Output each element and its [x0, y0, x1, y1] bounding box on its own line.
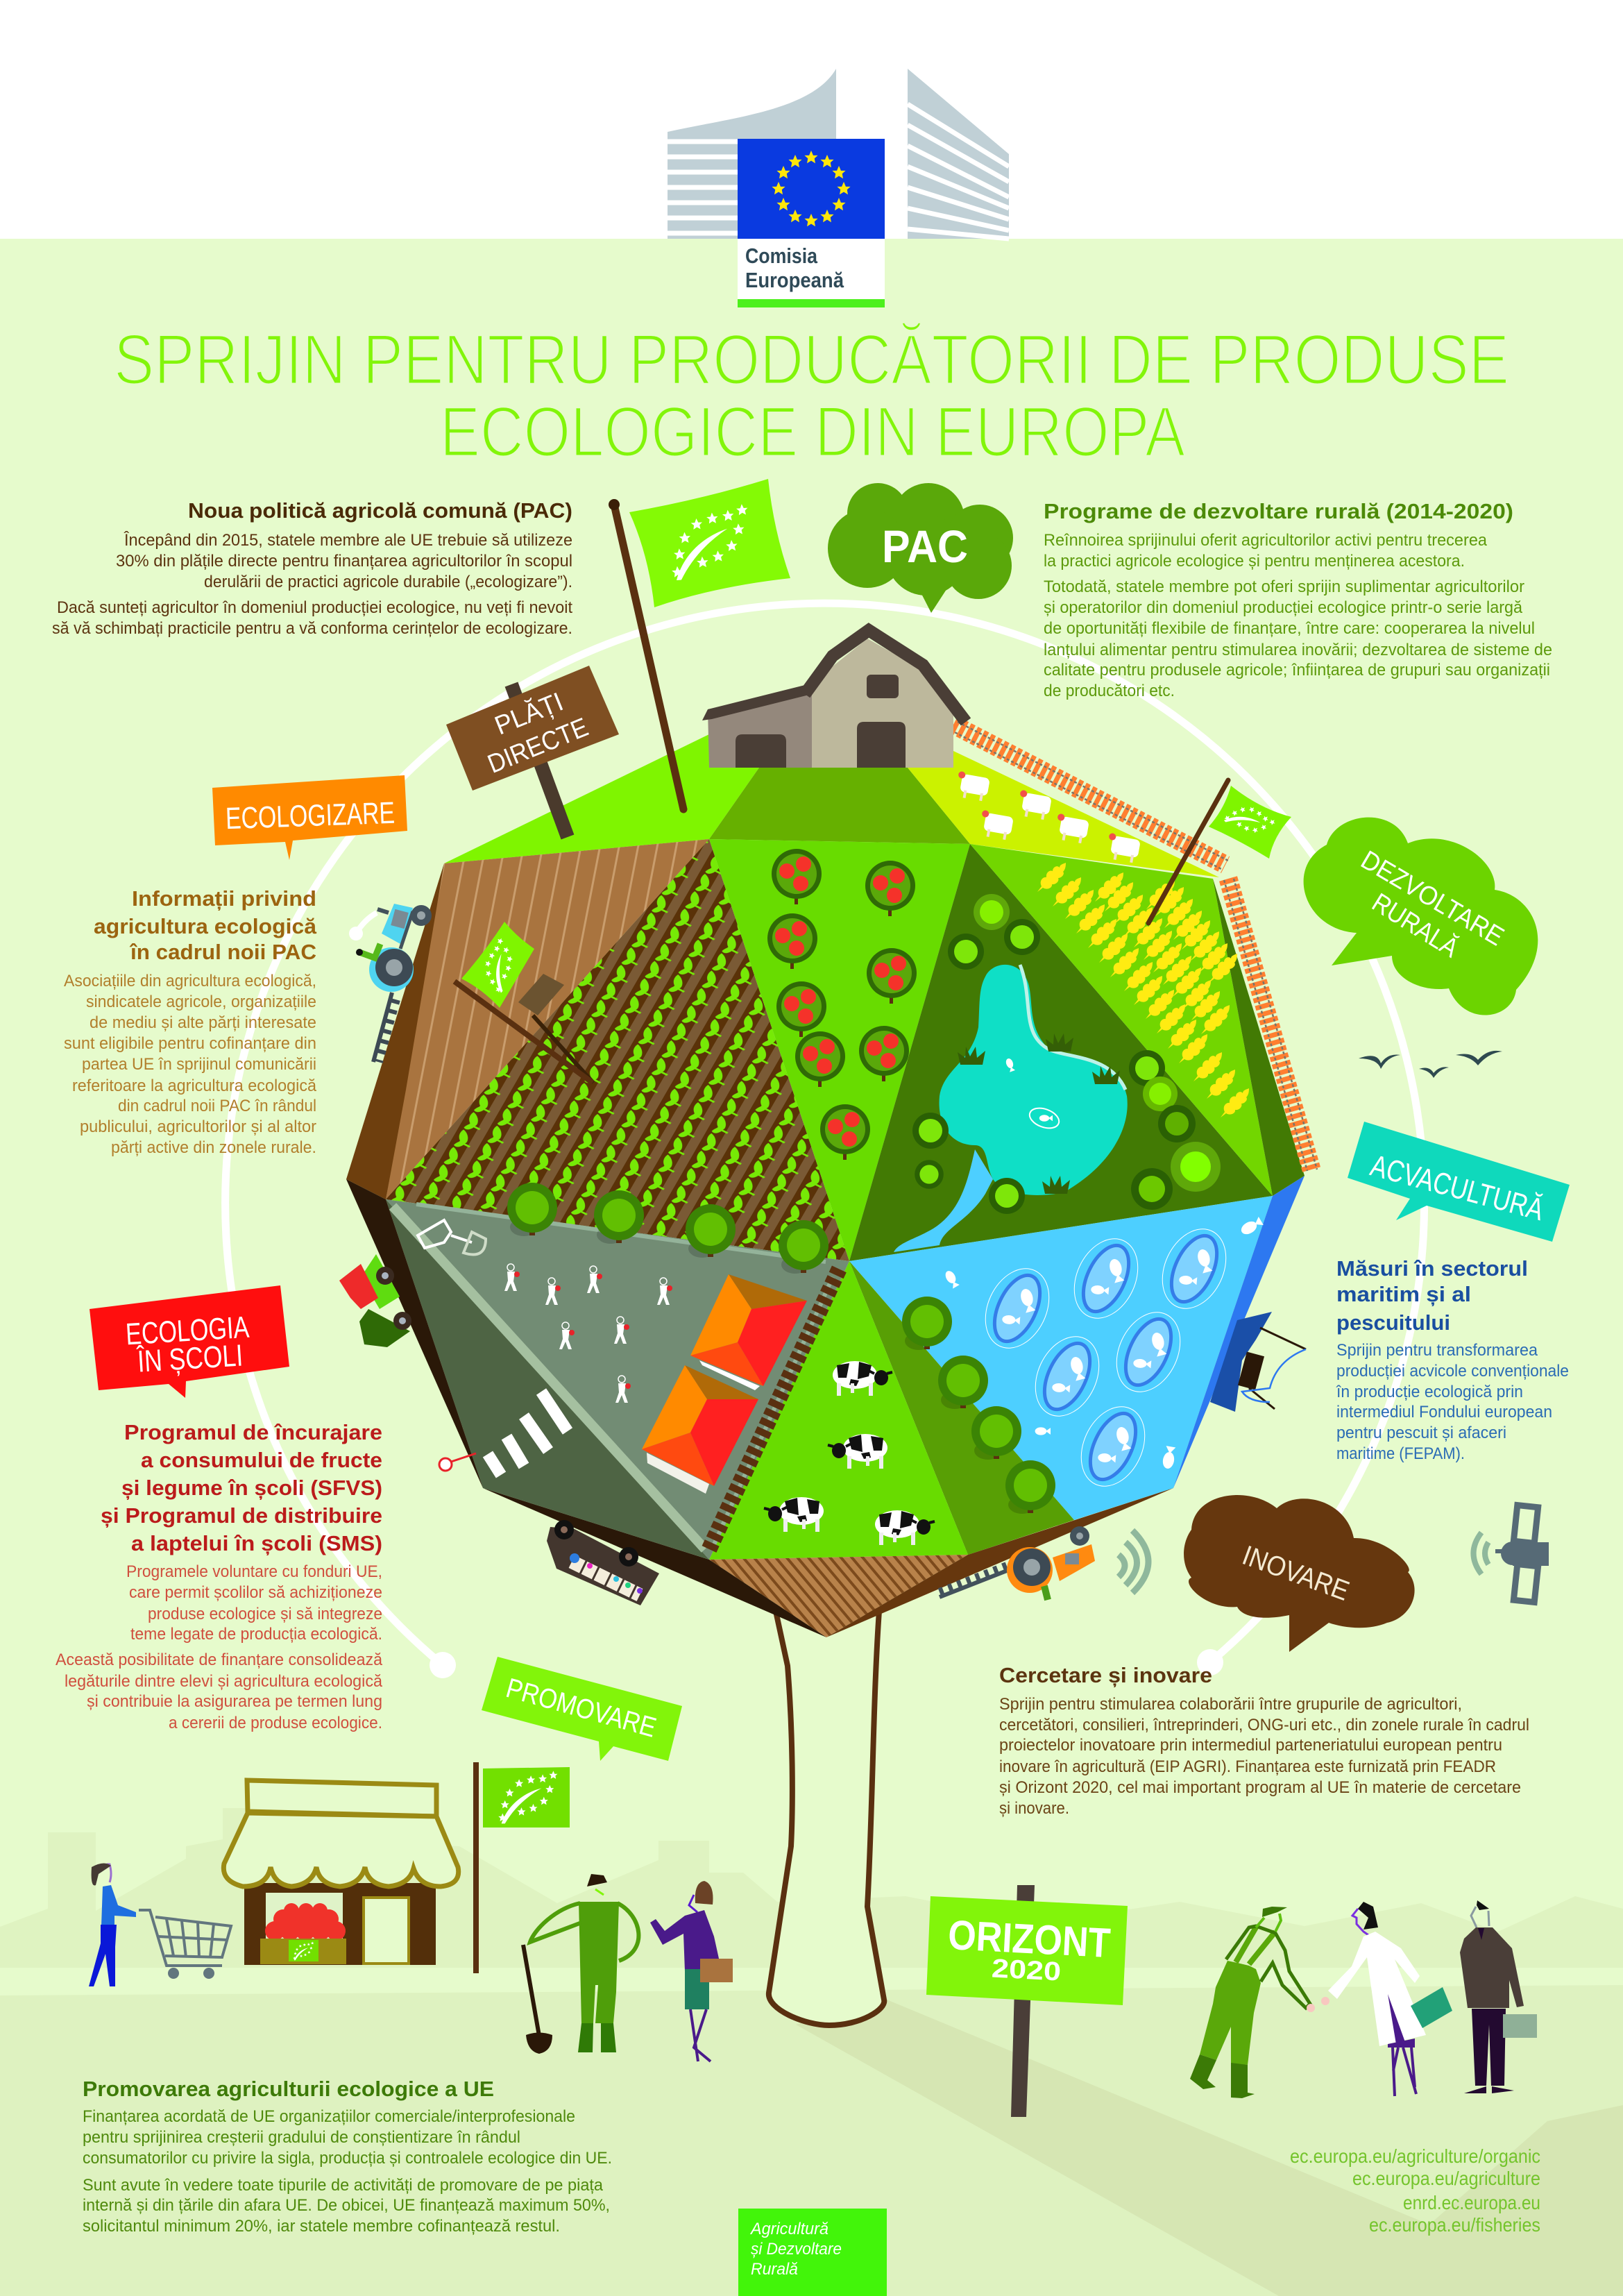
businesswoman with folder	[650, 1881, 733, 2061]
text block: cercetare si inovare: Sprijin pentru stimularea colaborării între grupurile de agricultori,	[999, 1695, 1462, 1714]
text block: masuri maritim: Măsuri în sectorul	[1336, 1256, 1528, 1281]
text block: informatii: sunt eligibile pentru cofinanțare din	[64, 1034, 316, 1053]
title	[114, 320, 1509, 471]
inovare cloud: INOVARE	[1239, 1540, 1353, 1607]
text block: informatii: Asociațiile din agricultura ecologică,	[64, 972, 316, 990]
directorate-general tag: Agricultură	[749, 2220, 829, 2238]
text block: programul scolar: care permit școlilor să achiziționeze	[129, 1583, 382, 1602]
flag: large organic flag	[609, 479, 790, 809]
pedestrian crossing	[488, 1392, 568, 1475]
farmer with shovel	[523, 1874, 638, 2054]
text block: programul scolar	[56, 1420, 383, 1732]
text block: informatii: agricultura ecologică	[94, 914, 317, 938]
directorate-general tag: și Dezvoltare	[751, 2240, 842, 2259]
ecologizare callout: ECOLOGIZARE	[225, 796, 396, 836]
ecologia in scoli callout: ECOLOGIA	[125, 1310, 250, 1351]
background landscape	[0, 1808, 1623, 2296]
text block: noua politica agricola: Noua politică agricolă comună (PAC)	[188, 498, 572, 523]
face: top green	[444, 734, 759, 863]
text block: masuri maritim: maritime (FEPAM).	[1336, 1444, 1465, 1463]
text block: masuri maritim: maritim și al	[1336, 1282, 1471, 1306]
tree trunk	[769, 1611, 884, 2025]
promovare callout: PROMOVARE	[503, 1673, 659, 1744]
orange fences	[951, 722, 1317, 1171]
text block: programe de dezvoltare rurala: la practici agricole ecologice și pentru menținerea acestora.	[1044, 552, 1465, 571]
website links: ec.europa.eu/agriculture/organic	[1290, 2145, 1540, 2167]
website links: enrd.ec.europa.eu	[1403, 2192, 1540, 2213]
text block: programe de dezvoltare rurala: de producători etc.	[1044, 682, 1175, 700]
title: ECOLOGICE DIN EUROPA	[440, 392, 1185, 471]
wheat rows	[1037, 863, 1249, 1117]
school roofs	[642, 1274, 807, 1494]
text block: programul scolar: a consumului de fructe	[141, 1448, 382, 1472]
text block: informatii: în cadrul noii PAC	[129, 940, 316, 964]
face: fish farm water	[849, 1176, 1305, 1520]
text block: programul scolar: Programele voluntare cu fonduri UE,	[126, 1562, 382, 1581]
face: below barn	[709, 768, 970, 844]
text block: informatii: publicului, agricultorilor și al altor	[80, 1117, 316, 1136]
text block: informatii: de mediu și alte părți interesate	[90, 1013, 316, 1032]
text block: cercetare si inovare: Cercetare și inovare	[999, 1663, 1212, 1687]
text block: programe de dezvoltare rurala: de oportunități flexibile de finanțare, între care: cooperarea la nivelul	[1044, 619, 1535, 638]
birds	[1359, 1051, 1502, 1078]
European Commission logo: Europeană	[745, 268, 844, 292]
website links: ec.europa.eu/fisheries	[1369, 2214, 1540, 2236]
European Commission logo: Comisia	[745, 244, 818, 268]
text block: programul scolar: Programul de încurajare	[124, 1420, 382, 1444]
text block: programul scolar: și contribuie la asigurarea pe termen lung	[87, 1692, 382, 1711]
text block: programe de dezvoltare rurala: Programe de dezvoltare rurală (2014-2020)	[1044, 499, 1513, 523]
text block: programe de dezvoltare rurala: lanțului alimentar pentru stimularea inovării; dezvoltarea de sisteme de	[1044, 641, 1552, 659]
text block: cercetare si inovare: și inovare.	[999, 1799, 1069, 1818]
plati directe sign: PLĂȚI	[491, 686, 568, 741]
text block: programul scolar: legăturile dintre elevi și agricultura ecologică	[65, 1672, 383, 1691]
text block: programul scolar: Această posibilitate de finanțare consolidează	[56, 1651, 383, 1669]
face: sheep pasture	[908, 751, 1219, 877]
text block: noua politica agricola: 30% din plățile directe pentru finanțarea agricultorilor în scopul	[116, 552, 572, 571]
stop sign	[439, 1453, 476, 1471]
inovare cloud	[1184, 1495, 1415, 1652]
European Commission logo	[668, 69, 1009, 307]
text block: noua politica agricola: Începând din 2015, statele membre ale UE trebuie să utilizeze	[124, 531, 572, 550]
text block: informatii: Informații privind	[132, 886, 316, 911]
plati directe sign: DIRECTE	[484, 713, 593, 779]
text block: cercetare si inovare: proiectelor inovatoare prin intermediul parteneriatului european pentru	[999, 1736, 1502, 1755]
website links: ec.europa.eu/agriculture	[1352, 2168, 1540, 2189]
text block: programul scolar: și legume în școli (SFVS)	[121, 1476, 382, 1500]
text block: masuri maritim: pescuitului	[1336, 1310, 1450, 1335]
flag on field	[454, 922, 593, 1083]
text block: masuri maritim: producției acvicole convenționale	[1336, 1362, 1569, 1381]
orange tractor with waves	[940, 1526, 1148, 1600]
text block: informatii: din cadrul noii PAC în rândul	[118, 1097, 316, 1115]
text block: programe de dezvoltare rurala	[1044, 499, 1552, 700]
text block: cercetare si inovare: inovare în agricultură (EIP AGRI). Finanțarea este furnizată prin FEADR	[999, 1757, 1496, 1776]
acvacultura callout	[1348, 1122, 1570, 1242]
small flag on corn field	[1148, 780, 1291, 923]
face: cow pasture	[709, 1261, 1074, 1560]
text block: promovarea agriculturii: Sunt avute în vedere toate tipurile de activități de promovare de pe piața	[83, 2176, 604, 2195]
text block: masuri maritim	[1336, 1256, 1569, 1463]
blue tractor	[349, 904, 432, 1062]
text block: promovarea agriculturii: internă și din țările din afara UE. De obicei, UE finanțează maximum 50%,	[83, 2196, 610, 2215]
face: underside	[483, 1488, 1173, 1637]
plati directe sign	[446, 666, 619, 837]
text block: noua politica agricola: derulării de practici agricole durabile („ecologizare”).	[204, 573, 572, 591]
text block: informatii: părți active din zonele rurale.	[111, 1138, 316, 1157]
dezvoltare rurala cloud: RURALĂ	[1367, 888, 1464, 964]
text block: cercetare si inovare	[999, 1663, 1529, 1818]
text block: informatii: sindicatele agricole, organizațiile	[86, 993, 316, 1011]
text block: promovarea agriculturii: consumatorilor cu privire la sigla, producția și controalele ecologice din UE.	[83, 2149, 612, 2168]
text block: programe de dezvoltare rurala: Totodată, statele membre pot oferi sprijin suplimentar agricultorilor	[1044, 577, 1524, 596]
promovare callout	[482, 1657, 682, 1761]
PAC speech cloud: PAC	[882, 521, 968, 572]
shopper with cart	[89, 1863, 231, 1986]
text block: informatii: partea UE în sprijinul comunicării	[82, 1055, 316, 1074]
playground markings	[418, 1220, 486, 1255]
text block: promovarea agriculturii: Promovarea agriculturii ecologice a UE	[83, 2077, 494, 2101]
row and pasture trees	[507, 1183, 1055, 1514]
promovare flag	[476, 1762, 570, 1973]
text block: promovarea agriculturii	[83, 2077, 612, 2236]
text block: promovarea agriculturii: solicitantul minimum 20%, iar statele membre cofinanțează restul.	[83, 2217, 560, 2236]
text block: programe de dezvoltare rurala: și operatorilor din domeniul producției ecologice printr-o serie largă	[1044, 598, 1523, 617]
directorate-general tag	[738, 2209, 887, 2296]
scientist in white coat	[1321, 1902, 1452, 2096]
fish ponds	[944, 1216, 1264, 1496]
face: school yard	[346, 1179, 849, 1560]
ecologia in scoli callout: ÎN ȘCOLI	[136, 1338, 244, 1379]
text block: programul scolar: a cererii de produse ecologice.	[169, 1714, 382, 1732]
orizont 2020 sign: 2020	[991, 1954, 1062, 1987]
text block: masuri maritim: în producție ecologică prin	[1336, 1383, 1523, 1401]
cows	[764, 1361, 935, 1545]
school bus	[547, 1520, 659, 1605]
text block: noua politica agricola: să vă schimbați practicile pentru a vă conforma cerințelor de ecologizare.	[52, 619, 572, 638]
text block: programul scolar: produse ecologice și să integreze	[148, 1605, 382, 1623]
ecologizare callout	[212, 775, 407, 860]
face: apple orchard	[709, 839, 970, 1261]
text block: programe de dezvoltare rurala: calitate pentru produsele agricole; înființarea de grupuri sau organizații	[1044, 661, 1550, 679]
satellite	[1474, 1505, 1549, 1602]
text block: programul scolar: și Programul de distribuire	[101, 1503, 382, 1528]
dezvoltare rurala cloud	[1304, 818, 1538, 1015]
face: crop field	[386, 839, 849, 1261]
acvacultura callout: ACVACULTURĂ	[1367, 1149, 1547, 1227]
text block: masuri maritim: intermediul Fondului european	[1336, 1403, 1552, 1421]
text block: programul scolar: teme legate de producția ecologică.	[130, 1625, 382, 1644]
text block: masuri maritim: Sprijin pentru transformarea	[1336, 1341, 1538, 1360]
text block: cercetare si inovare: și Orizont 2020, cel mai important program al UE în materie de cercetare	[999, 1778, 1521, 1797]
orizont 2020 sign	[926, 1885, 1128, 2117]
text block: informatii	[64, 886, 317, 1157]
directorate-general tag: Rurală	[751, 2260, 798, 2279]
connecting ring	[226, 603, 1425, 1678]
pond trees	[912, 894, 1221, 1214]
text block: noua politica agricola	[52, 498, 572, 638]
face: pond area	[849, 844, 1273, 1261]
fishing boat	[1210, 1312, 1306, 1412]
school yard children	[504, 1264, 672, 1403]
dezvoltare rurala cloud: DEZVOLTARE	[1356, 845, 1509, 952]
text block: noua politica agricola: Dacă sunteți agricultor în domeniul producției ecologice, nu veți fi nevoit	[57, 598, 572, 617]
text block: promovarea agriculturii: Finanțarea acordată de UE organizațiilor comerciale/interprofesionale	[83, 2107, 575, 2126]
ecologia in scoli callout	[90, 1285, 289, 1398]
orizont 2020 sign: ORIZONT	[947, 1911, 1112, 1966]
text block: masuri maritim: pentru pescuit și afaceri	[1336, 1424, 1506, 1442]
shop	[223, 1780, 459, 1965]
text block: promovarea agriculturii: pentru sprijinirea creșterii gradului de conștientizare în rândul	[83, 2128, 520, 2147]
apple trees	[767, 849, 917, 1160]
polyhedron farm	[346, 722, 1317, 1637]
PAC speech cloud	[828, 483, 1013, 613]
barn	[702, 630, 966, 768]
sheep	[955, 771, 1141, 863]
text block: programe de dezvoltare rurala: Reînnoirea sprijinului oferit agricultorilor activi pentru trecerea	[1044, 531, 1488, 550]
website links	[1290, 2145, 1540, 2236]
businessman	[1460, 1900, 1537, 2093]
brown fence	[709, 1268, 840, 1549]
text block: informatii: referitoare la agricultura ecologică	[72, 1077, 317, 1095]
text block: programul scolar: a laptelui în școli (SMS)	[131, 1531, 382, 1555]
green truck with apples	[339, 1254, 411, 1347]
farmer shaking hands	[1190, 1907, 1315, 2098]
text block: cercetare si inovare: cercetători, consilieri, întreprinderi, ONG-uri etc., din zonele rurale în cadrul	[999, 1716, 1529, 1734]
face: striped slope	[346, 839, 709, 1199]
pond and stream	[894, 965, 1128, 1252]
face: corn field	[970, 844, 1305, 1196]
